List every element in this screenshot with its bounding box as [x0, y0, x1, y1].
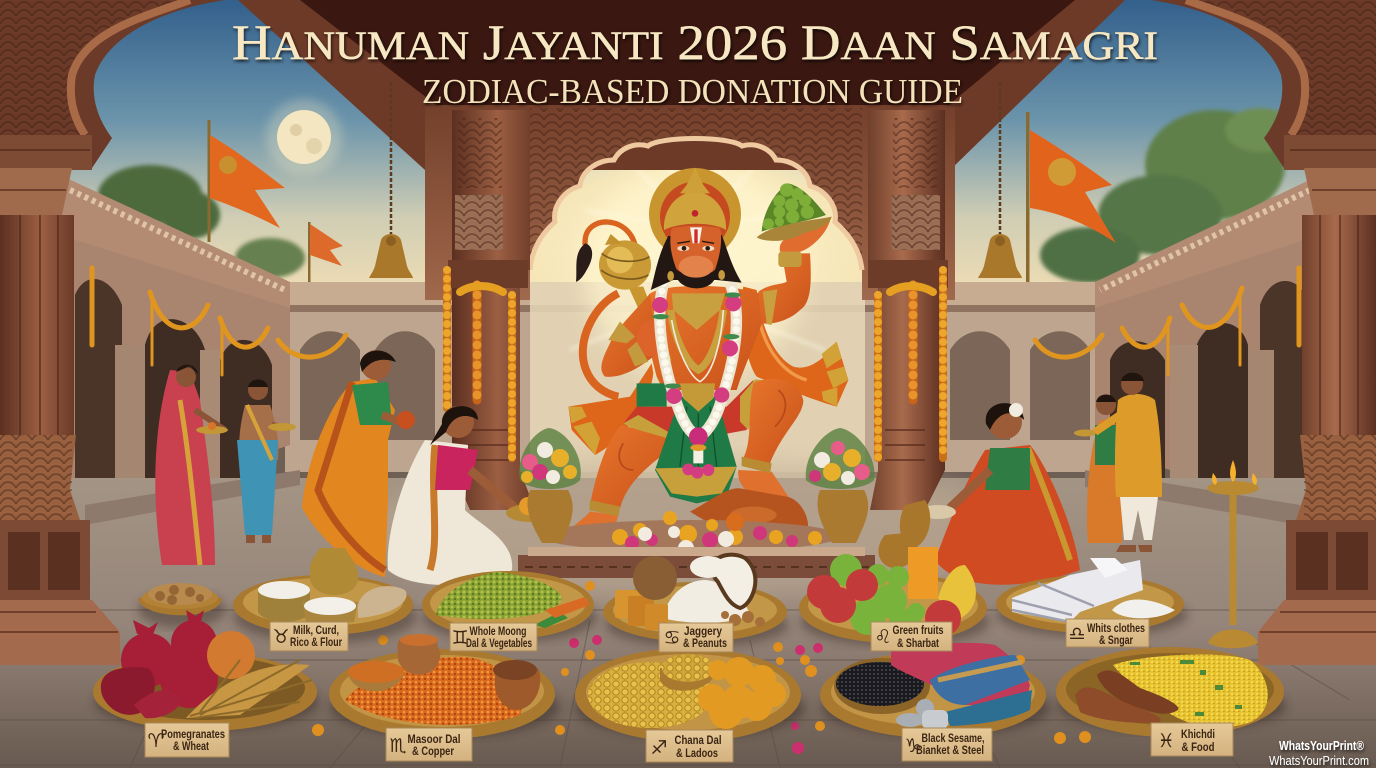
flower offerings at statue base [540, 511, 840, 556]
label: Pomegranates and Wheat [145, 723, 229, 757]
label: Whits clothes and Sngar: ♎︎ [1068, 623, 1086, 645]
crown and halo [649, 167, 741, 260]
label: Black Sesame, Bianket and Steel [902, 728, 992, 761]
worshipper: seated woman in white sari [388, 406, 554, 585]
sash right [741, 287, 848, 407]
necklaces [671, 293, 725, 382]
subtitle: ZODIAC-BASED DONATION GUIDE [422, 72, 963, 111]
hanuman statue [568, 167, 848, 540]
plate: khichdi and shoes [1056, 647, 1286, 737]
plate: masoor dal and copper [329, 634, 560, 739]
label: Masoor Dal and Copper: & Copper [412, 744, 454, 758]
label: Chana Dal and Ladoos: Chana Dal [674, 733, 722, 747]
central columns [448, 110, 948, 510]
seated woman in red sari [920, 403, 1080, 585]
label: Pomegranates and Wheat: & Wheat [173, 739, 209, 753]
central temple ceiling [238, 0, 1125, 170]
left arm [601, 293, 667, 377]
sky background [0, 0, 1376, 300]
armband and wrist [608, 322, 648, 367]
watermark [1269, 738, 1369, 768]
garland [652, 283, 741, 479]
marigold garlands on colonnades [92, 268, 1299, 375]
label: Chana Dal and Ladoos: & Ladoos [676, 746, 718, 760]
bracelets and armlet [763, 252, 802, 325]
worshipper: woman in orange sari far right [1074, 394, 1122, 543]
mace [599, 234, 672, 367]
back wall arches [300, 331, 1090, 440]
left foreground pillar [0, 0, 225, 665]
label: Black Sesame, Bianket and Steel: ♑︎ [904, 735, 922, 757]
hair [651, 235, 742, 290]
apron [655, 397, 737, 503]
label: Khichdi and Food [1151, 723, 1233, 756]
label: Milk, Curd, Rico and Flour: Milk, Curd, [293, 623, 339, 637]
face [667, 226, 725, 288]
plate: jaggery and peanuts [603, 555, 789, 647]
belt [680, 383, 715, 412]
scattered marigolds [312, 581, 1091, 754]
right leg [738, 379, 803, 503]
arch carving texture [530, 108, 862, 270]
worshipper: man in yellow kurta [1095, 373, 1162, 552]
plate: white clothes and sugar [996, 558, 1188, 637]
label: Milk, Curd, Rico and Flour: Rico & Flour [290, 635, 342, 649]
flower vase left [519, 428, 581, 543]
colonnade left [60, 175, 290, 520]
flower vase right [806, 428, 874, 543]
label: Milk, Curd, Rico and Flour [270, 622, 348, 651]
torso [646, 286, 763, 390]
label: Khichdi and Food: ♓︎ [1157, 730, 1175, 752]
carved central wall with scalloped arch [425, 105, 955, 300]
trees left [98, 165, 305, 278]
label: Green fruits and Sharbat: & Sharbat [897, 636, 939, 650]
raised arm [758, 218, 831, 324]
label: Jaggery and Peanuts: Jaggery [684, 624, 722, 638]
label: Milk, Curd, Rico and Flour: ♉︎ [272, 626, 290, 648]
inner arch sky glow [510, 120, 880, 310]
flag small [308, 222, 343, 282]
right foreground pillar [1151, 0, 1376, 665]
trees right [1040, 108, 1295, 283]
courtyard back wall [285, 282, 1100, 482]
label: Whits clothes and Sngar: Whits clothes [1087, 621, 1145, 635]
chain and bell left [369, 82, 413, 278]
tail tip [576, 243, 592, 282]
hanging marigolds on columns [447, 270, 943, 458]
label: Masoor Dal and Copper: Masoor Dal [408, 732, 460, 746]
label: Masoor Dal and Copper [386, 728, 472, 761]
chain and bell right [978, 82, 1022, 278]
label: Jaggery and Peanuts [659, 623, 733, 652]
label: Jaggery and Peanuts: & Peanuts [683, 636, 727, 650]
brass pots beside seated woman [878, 500, 930, 568]
plate: pomegranates and wheat [93, 610, 319, 731]
plate: nuts bowl [138, 583, 226, 628]
label: Chana Dal and Ladoos: ♐︎ [650, 737, 668, 759]
sun rays behind statue [570, 140, 825, 380]
label: Whole Moong Dal and Vegetables: Whole Moong [470, 624, 526, 638]
label: Whits clothes and Sngar [1066, 619, 1149, 647]
plate: milk, curd, rice and flour [233, 548, 417, 643]
label: Black Sesame, Bianket and Steel: Black Sesame, [922, 731, 984, 745]
main title: HANUMAN JAYANTI 2026 D AAN SAMAGRI [232, 14, 1158, 70]
brass oil lamp [1207, 460, 1259, 648]
left leg [568, 425, 673, 538]
label: Whole Moong Dal and Vegetables: Dal & Vegetables [466, 636, 532, 650]
tail [583, 222, 635, 397]
label: Green fruits and Sharbat: ♌︎ [874, 626, 892, 648]
arch inner cream edge [530, 138, 862, 270]
stone platform [518, 547, 875, 578]
plate: green fruits and sharbat [799, 547, 990, 646]
label: Pomegranates and Wheat: ♈︎ [147, 730, 165, 752]
worshipper: woman in red sari [155, 365, 228, 565]
plate: black sesame, blanket and steel [820, 643, 1050, 738]
fruit plate [757, 183, 832, 241]
colonnade right [1095, 175, 1320, 520]
plate: chana dal and ladoos [575, 648, 805, 742]
label: Pomegranates and Wheat: Pomegranates [161, 727, 225, 741]
worshipper: man in blue cloth [237, 380, 296, 543]
worshipper: woman in orange sari [302, 350, 415, 577]
moon [266, 99, 342, 175]
label: Whits clothes and Sngar: & Sngar [1099, 633, 1133, 647]
plate: moong dal and vegetables [422, 571, 598, 642]
floor tiles [0, 610, 1376, 768]
label: Jaggery and Peanuts: ♋︎ [663, 627, 681, 649]
dhoti red [623, 379, 762, 450]
label: Green fruits and Sharbat [871, 622, 952, 651]
label: Masoor Dal and Copper: ♏︎ [389, 735, 407, 757]
dark ceiling interior [300, 0, 1075, 108]
label: Khichdi and Food: & Food [1182, 740, 1214, 754]
left and right temple steps [85, 460, 1300, 600]
flag right [1026, 112, 1116, 282]
label: Whole Moong Dal and Vegetables: ♊︎ [451, 627, 469, 649]
label: Khichdi and Food: Khichdi [1181, 727, 1215, 741]
flag left [208, 120, 285, 242]
label: Whole Moong Dal and Vegetables [450, 623, 537, 651]
floor [0, 478, 1376, 768]
label: Black Sesame, Bianket and Steel: Bianket & Steel [916, 743, 984, 757]
rock [690, 488, 808, 540]
label: Green fruits and Sharbat: Green fruits [892, 623, 944, 637]
label: Chana Dal and Ladoos [646, 730, 733, 762]
sash left [568, 363, 653, 455]
